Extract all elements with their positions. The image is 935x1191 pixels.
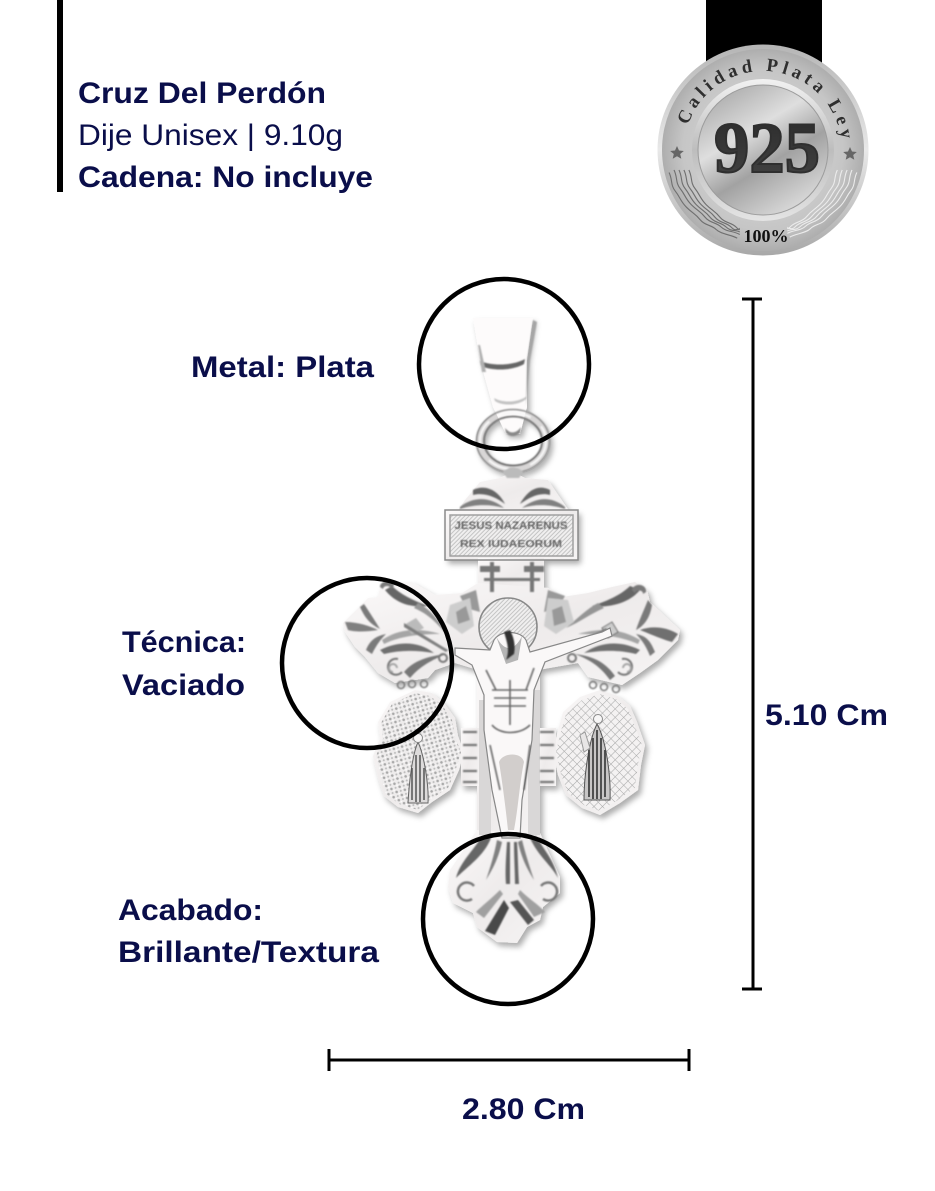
right medal texture — [556, 694, 642, 811]
left medal texture — [376, 693, 461, 810]
top finial lobes — [460, 468, 565, 509]
plaque — [445, 510, 578, 560]
bail shading — [478, 320, 537, 436]
dimension: width arrow — [329, 1049, 689, 1071]
centre bead clusters — [446, 598, 574, 634]
top finial — [457, 472, 570, 512]
dimension: height value: 5.10 Cm — [765, 699, 888, 732]
badge wave lines right — [787, 170, 857, 237]
label: finish — [118, 894, 379, 969]
highlight circle: finish — [423, 834, 593, 1004]
badge wave lines left — [669, 170, 740, 238]
stem detail — [460, 562, 565, 612]
jump ring — [480, 413, 546, 469]
pendant: silver cross — [343, 318, 680, 943]
badge percent: 100% — [744, 226, 788, 246]
arms — [343, 582, 680, 685]
label: technique — [122, 626, 246, 702]
label: technique: Técnica: — [122, 626, 246, 659]
accent bar — [57, 0, 63, 192]
label: finish: Brillante/Textura — [118, 936, 379, 969]
label: technique: Vaciado — [122, 669, 245, 702]
label: metal: Metal: Plata — [191, 351, 374, 384]
side beads — [461, 728, 479, 786]
left arm swirl — [388, 654, 447, 675]
right arm wedges — [558, 585, 678, 680]
title: Cruz Del Perdón — [78, 77, 326, 110]
bottom finial — [448, 830, 560, 943]
emboss wedges — [345, 320, 678, 935]
plaque inscription: REX IUDAEORUM — [460, 539, 562, 550]
halo and corpus — [455, 598, 612, 838]
dimension: width value: 2.80 Cm — [462, 1093, 585, 1126]
shaft side bands — [479, 690, 540, 835]
highlight circle: technique — [282, 578, 452, 748]
bottom finial folds — [456, 836, 558, 935]
right medal — [553, 690, 645, 815]
highlight circle: metal — [419, 279, 589, 449]
right arm swirl — [568, 654, 632, 675]
badge ring text: Calidad Plata Ley — [678, 58, 850, 138]
beads — [398, 680, 620, 782]
stem — [478, 558, 544, 598]
bottom finial swirls — [458, 883, 557, 901]
heading block: product details — [78, 77, 373, 194]
badge stars — [670, 146, 857, 160]
plaque inscription: JESUS NAZARENUS — [454, 520, 568, 532]
shaft — [477, 665, 540, 840]
plaque inscription — [445, 510, 578, 560]
label: finish: Acabado: — [118, 894, 263, 927]
chain note: Cadena: No incluye — [78, 161, 373, 194]
badge: 925 silver seal — [658, 44, 868, 256]
badge number: 925 — [714, 108, 820, 188]
left arm wedges — [345, 581, 448, 678]
subtitle: Dije Unisex | 9.10g — [78, 119, 343, 152]
left medal — [373, 690, 464, 813]
bail — [473, 318, 533, 434]
dimension: height arrow — [742, 299, 762, 989]
pendant body with shadow — [343, 318, 680, 943]
jump ring shading — [476, 410, 550, 472]
black ribbon — [706, 0, 822, 65]
